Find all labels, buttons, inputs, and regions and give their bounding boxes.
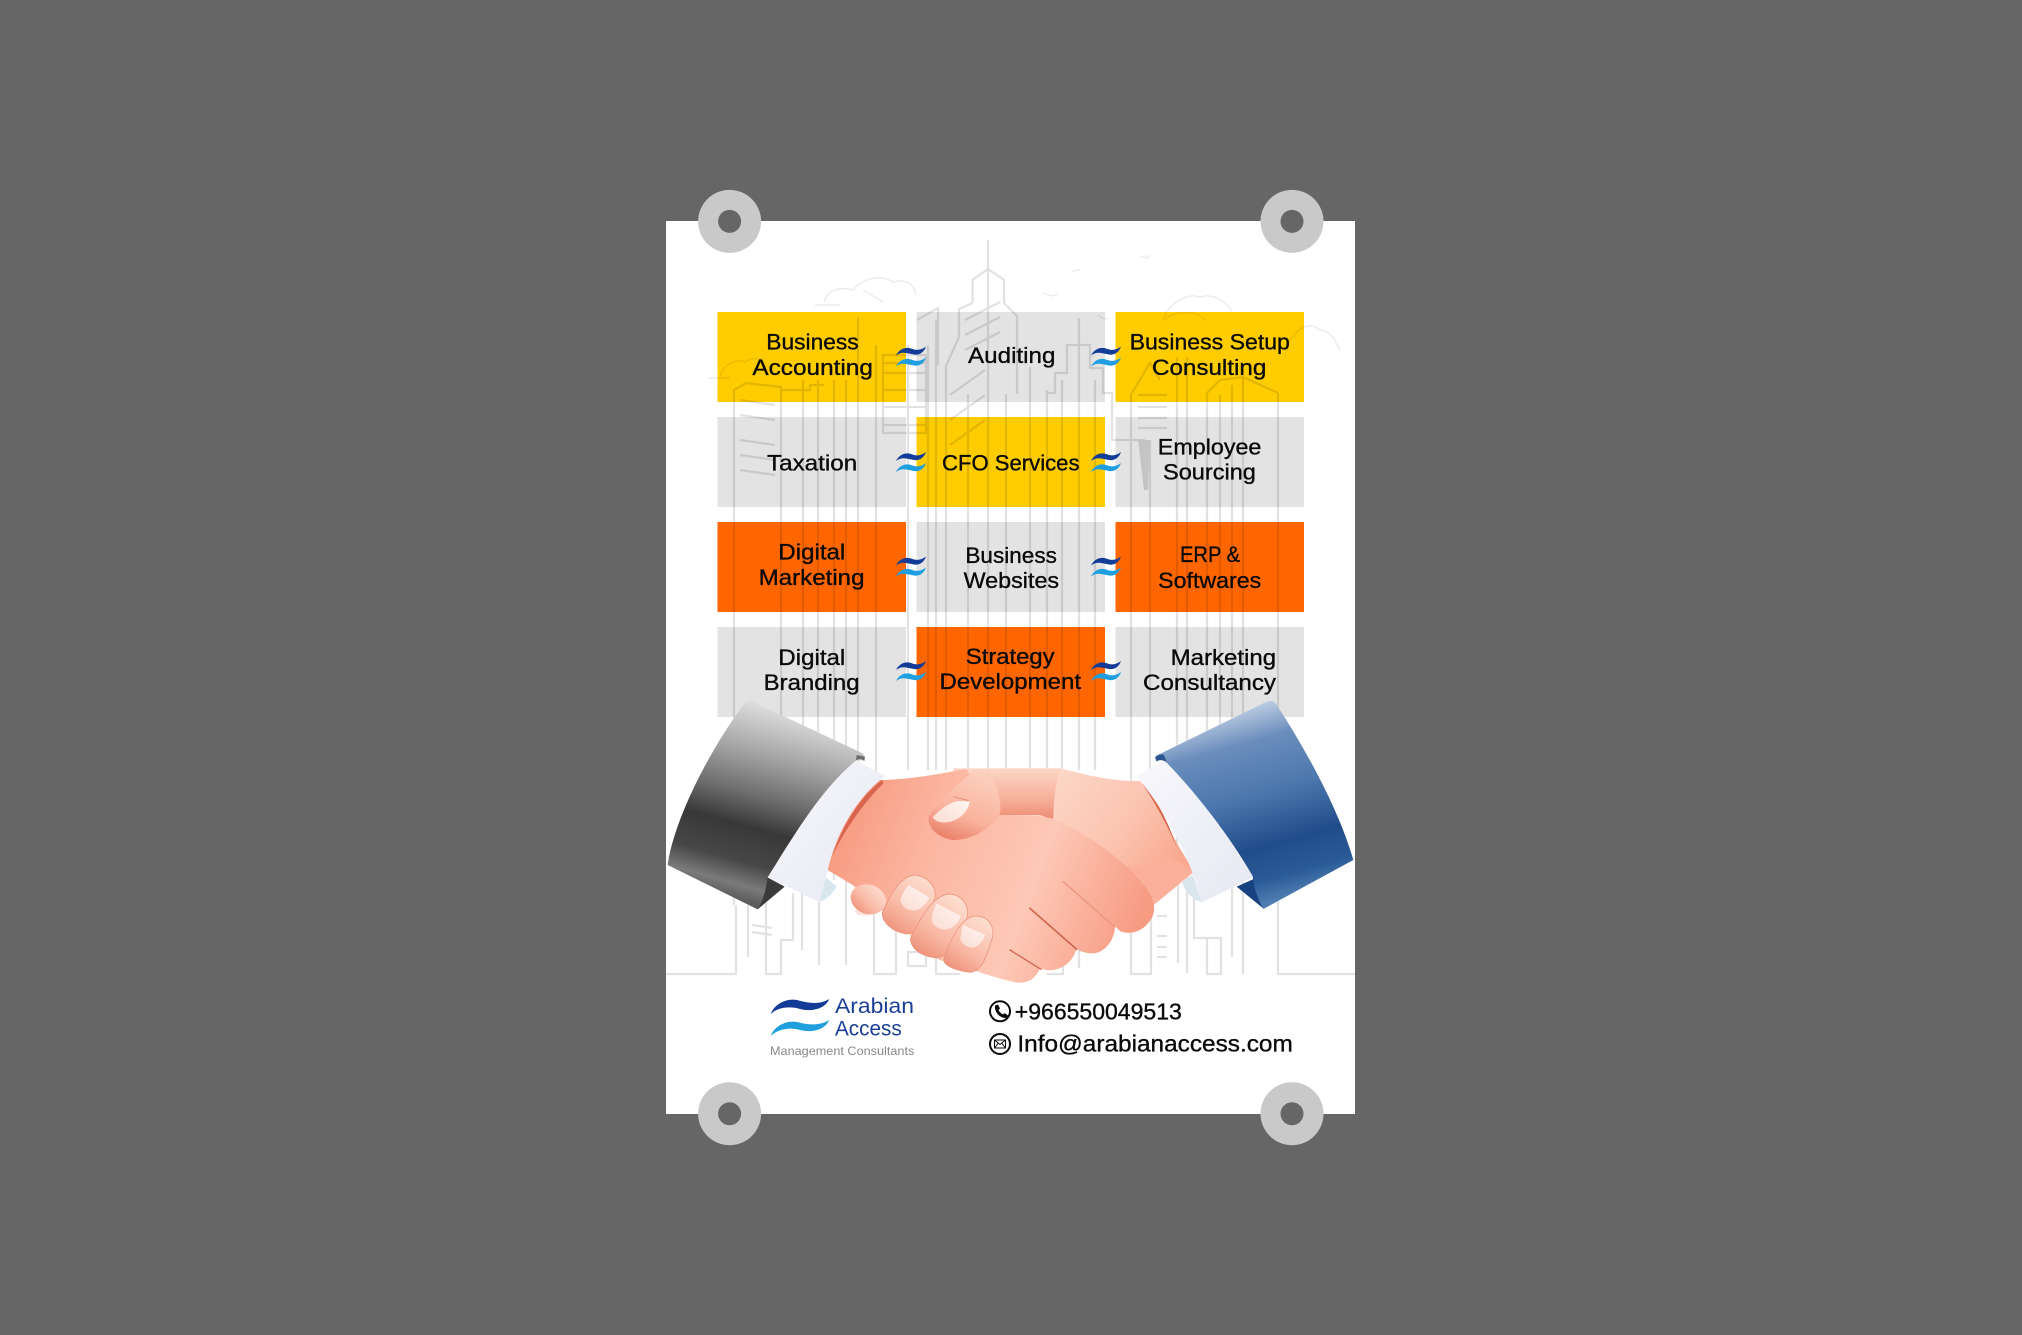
pin: bottom left — [698, 1082, 761, 1145]
left sleeve — [668, 701, 865, 909]
tile: Business Accounting: Business — [766, 330, 859, 355]
tile: Employee Sourcing: Employee — [1158, 434, 1261, 459]
little finger — [846, 879, 890, 919]
icon: wave row 4 right — [1091, 661, 1121, 681]
tile: ERP & Softwares: ERP & — [1180, 542, 1240, 567]
icon: wave row 1 right — [1091, 346, 1121, 366]
tile: Strategy Development: Strategy — [966, 644, 1055, 669]
tile: ERP & Softwares — [1116, 522, 1304, 612]
tile: Business Accounting — [718, 312, 906, 402]
email address: Info@arabianaccess.com — [1017, 1031, 1293, 1057]
thumb — [929, 769, 1000, 840]
panel: white poster — [666, 221, 1355, 1114]
tile: Taxation: Taxation — [767, 450, 857, 475]
right hand back — [953, 768, 1194, 905]
logo mark — [771, 999, 829, 1036]
connector wave icons — [896, 346, 1121, 681]
tile: Business Setup Consulting: Consulting — [1152, 355, 1266, 380]
tile: Employee Sourcing: Sourcing — [1163, 460, 1256, 485]
tile: Business Websites: Business — [965, 543, 1057, 568]
icon: wave row 4 left — [896, 661, 926, 681]
cityscape line art background — [666, 240, 1355, 974]
ring finger — [882, 875, 935, 934]
tile: Digital Branding — [718, 627, 906, 717]
logo tagline: Management Consultants — [770, 1044, 914, 1058]
tile: Digital Branding: Branding — [764, 670, 860, 695]
tile: ERP & Softwares: Softwares — [1158, 568, 1261, 593]
logo: Arabian Access — [770, 995, 914, 1058]
icon: wave row 2 left — [896, 452, 926, 472]
mounting pins — [698, 190, 1324, 1145]
icon: wave row 3 left — [896, 556, 926, 576]
logo wordmark: Arabian — [835, 995, 914, 1018]
tile: Auditing: Auditing — [968, 343, 1056, 368]
index finger — [944, 916, 993, 972]
contact details — [990, 998, 1293, 1057]
icon: phone — [990, 1001, 1010, 1021]
tile: Digital Marketing — [718, 522, 906, 612]
middle finger — [910, 894, 968, 958]
left hand palm — [828, 769, 1154, 983]
tile: Strategy Development: Development — [940, 669, 1081, 694]
tile: Strategy Development — [916, 627, 1105, 717]
icon: wave row 3 right — [1091, 556, 1121, 576]
icon: email — [990, 1034, 1010, 1054]
logo: Arabian Access: Access — [835, 1018, 902, 1041]
tile: Business Accounting: Accounting — [752, 355, 873, 380]
illustration: handshake — [668, 701, 1353, 983]
tile: Marketing Consultancy — [1116, 627, 1304, 717]
wrist shadow — [832, 780, 883, 857]
pin: top left — [698, 190, 761, 253]
left cuff — [768, 761, 885, 902]
icon: wave row 2 right — [1091, 452, 1121, 472]
tile: Business Setup Consulting: Business Setup — [1130, 330, 1290, 355]
tile: Auditing — [916, 312, 1105, 402]
tile: Marketing Consultancy: Consultancy — [1143, 670, 1276, 695]
tile: Marketing Consultancy: Marketing — [1171, 645, 1276, 670]
phone number: +966550049513 — [1015, 998, 1182, 1024]
pin: top right — [1260, 190, 1324, 253]
tile: Digital Branding: Digital — [778, 645, 845, 670]
pin: bottom right — [1260, 1082, 1324, 1145]
tile: Business Websites — [916, 522, 1105, 612]
finger creases — [1010, 882, 1114, 969]
tile: Business Setup Consulting — [1116, 312, 1304, 402]
panel: service tile grid — [718, 312, 1304, 717]
tile: Employee Sourcing — [1116, 417, 1304, 507]
tile: Business Websites: Websites — [964, 568, 1059, 593]
tile: Taxation — [718, 417, 906, 507]
icon: wave row 1 left — [896, 346, 926, 366]
right cuff and sleeve — [1136, 701, 1353, 909]
tile: CFO Services — [916, 417, 1105, 507]
tile: Digital Marketing: Digital — [778, 539, 845, 564]
tile: CFO Services: CFO Services — [942, 450, 1080, 475]
tile: Digital Marketing: Marketing — [759, 565, 864, 590]
